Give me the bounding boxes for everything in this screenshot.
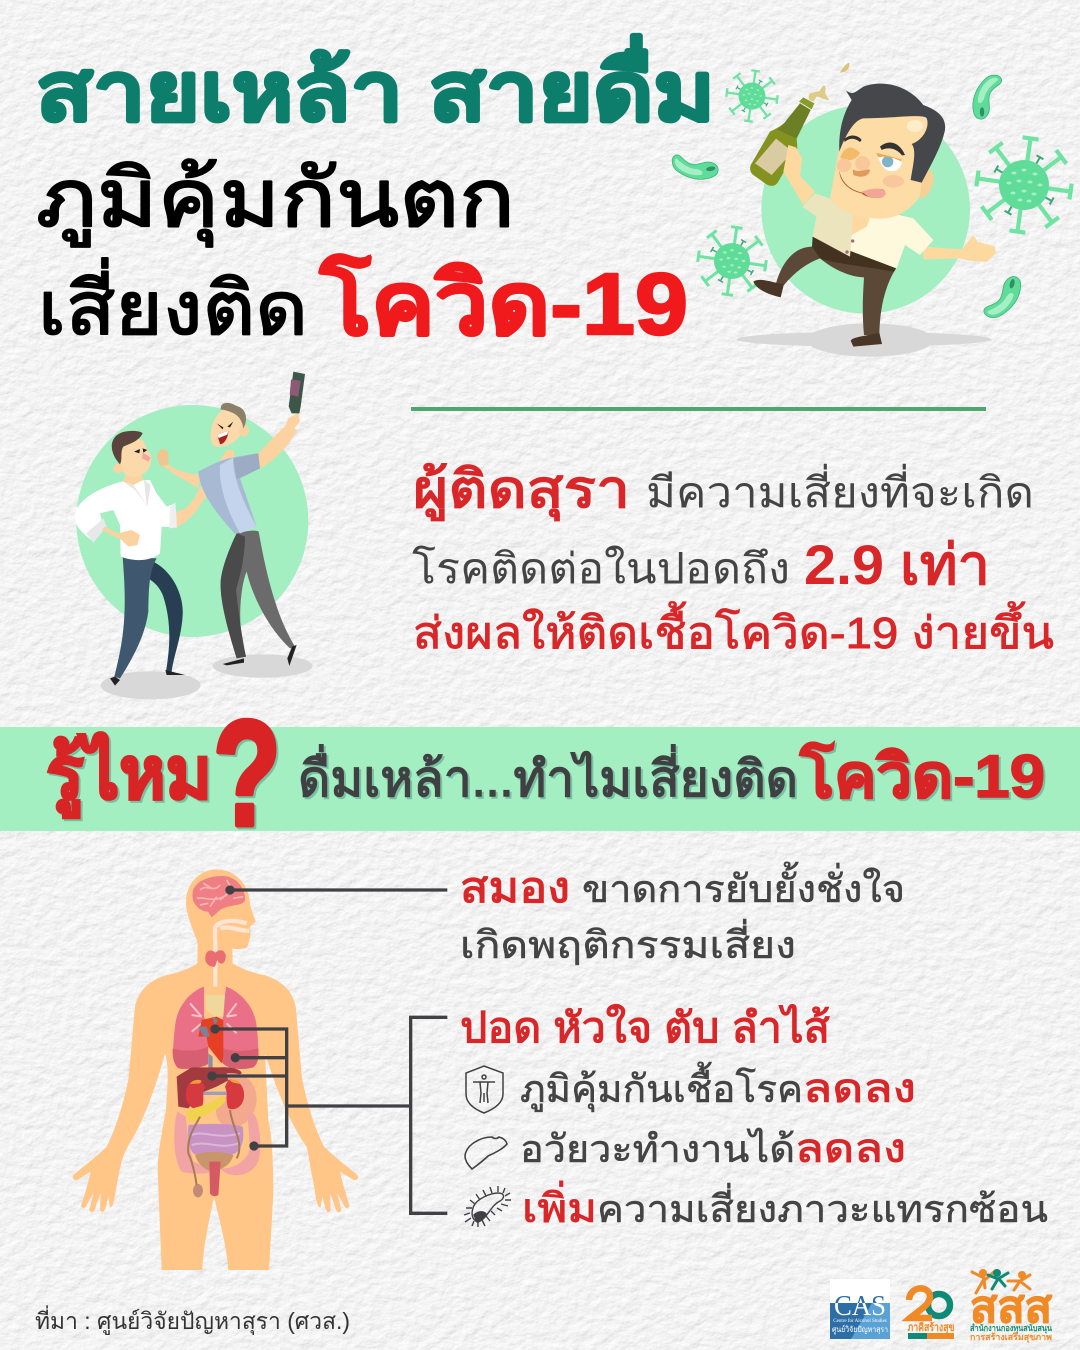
organ: bladder and reproductive tract	[188, 1110, 239, 1197]
illustration: drunk man with bottle	[737, 63, 996, 357]
virus icons and bacteria around the drunk man	[671, 67, 1077, 323]
logo: ThaiHealth: สำนักงานกองทุนสนับสนุน	[970, 1323, 1053, 1334]
grey line 2: โรคติดต่อในปอดถึง	[412, 544, 790, 592]
brain label: สมอง	[460, 864, 570, 911]
effect 2 text: อวัยวะทำงานได้	[520, 1128, 795, 1171]
banner question text: ดื่มเหล้า...ทำไมเสี่ยงติด	[298, 745, 798, 807]
banner band	[0, 689, 1080, 857]
organ: liver	[177, 1067, 242, 1108]
title line 3: black: เสี่ยงติด	[38, 257, 308, 350]
red conclusion line: ส่งผลให้ติดเชื้อโควิด-19 ง่ายขึ้น	[413, 601, 1054, 658]
logo: 20 years partner	[908, 1288, 954, 1339]
anatomy figure with organs	[73, 869, 358, 1270]
icon: liver	[465, 1137, 507, 1169]
statistic paragraph	[412, 461, 1054, 658]
title line 2: black: ภูมิคุ้มกันตก	[36, 154, 515, 247]
big question mark glyph: ?	[213, 689, 281, 857]
banner heading: do you know: รู้ไหม	[46, 731, 212, 819]
red lead: alcohol users: ผู้ติดสุรา	[413, 461, 630, 522]
organ: kidneys and pancreas	[186, 1080, 244, 1122]
icon: bacterium	[464, 1186, 511, 1227]
effect 1 decrease: ลดลง	[803, 1067, 916, 1111]
caption: brain	[460, 861, 905, 967]
logo: CAS: ศูนย์วิจัยปัญหาสุรา	[832, 1324, 888, 1335]
brain effect line 1: ขาดการยับยั้งชั่งใจ	[582, 861, 905, 911]
organ: intestines	[174, 1112, 260, 1175]
organ: heart	[198, 1017, 223, 1068]
organ: brain	[192, 876, 245, 917]
effect 1 text: ภูมิคุ้มกันเชื้อโรค	[520, 1061, 803, 1112]
source note: ที่มา : ศูนย์วิจัยปัญหาสุรา (ศวส.)	[35, 1305, 350, 1335]
organ: lungs	[173, 987, 259, 1069]
logo: CAS: CAS	[834, 1290, 886, 1322]
title block	[36, 34, 715, 353]
organ: airway and throat	[205, 921, 249, 987]
title line 1: green: สายเหล้า สายดื่ม	[36, 34, 715, 138]
illustration: two men fighting	[75, 372, 313, 699]
logo: CAS	[830, 1279, 890, 1339]
logo: CAS: Centre for Alcohol Studies	[833, 1319, 887, 1324]
effect 3 text: ความเสี่ยงภาวะแทรกซ้อน	[597, 1183, 1048, 1231]
red statistic 2.9 times: 2.9 เท่า	[804, 533, 990, 596]
banner covid text: โควิด-19	[799, 741, 1045, 810]
divider rule	[411, 407, 986, 411]
organs heading: ปอด หัวใจ ตับ ลำไส้	[460, 1004, 830, 1051]
logo: ThaiHealth	[970, 1270, 1053, 1343]
logo: 20 years partner: ภาคีสร้างสุข	[908, 1321, 954, 1335]
body silhouette	[73, 869, 358, 1270]
grey line 1: มีความเสี่ยงที่จะเกิด	[646, 464, 1034, 516]
logo: CAS: CAS	[834, 1290, 886, 1322]
caption: organs	[460, 1004, 1048, 1231]
icon: shield with body	[466, 1066, 503, 1113]
logo: ThaiHealth: สสส	[970, 1283, 1052, 1332]
title line 3: red highlight: โควิด-19	[319, 254, 688, 353]
organ: stomach	[216, 1073, 257, 1127]
effect 2 decrease: ลดลง	[795, 1127, 906, 1171]
effect 3 increase: เพิ่ม	[522, 1181, 597, 1231]
leader lines from organs to captions	[207, 885, 447, 1213]
logo: ThaiHealth: การสร้างเสริมสุขภาพ	[970, 1332, 1052, 1343]
brain effect line 2: เกิดพฤติกรรมเสี่ยง	[460, 919, 796, 967]
